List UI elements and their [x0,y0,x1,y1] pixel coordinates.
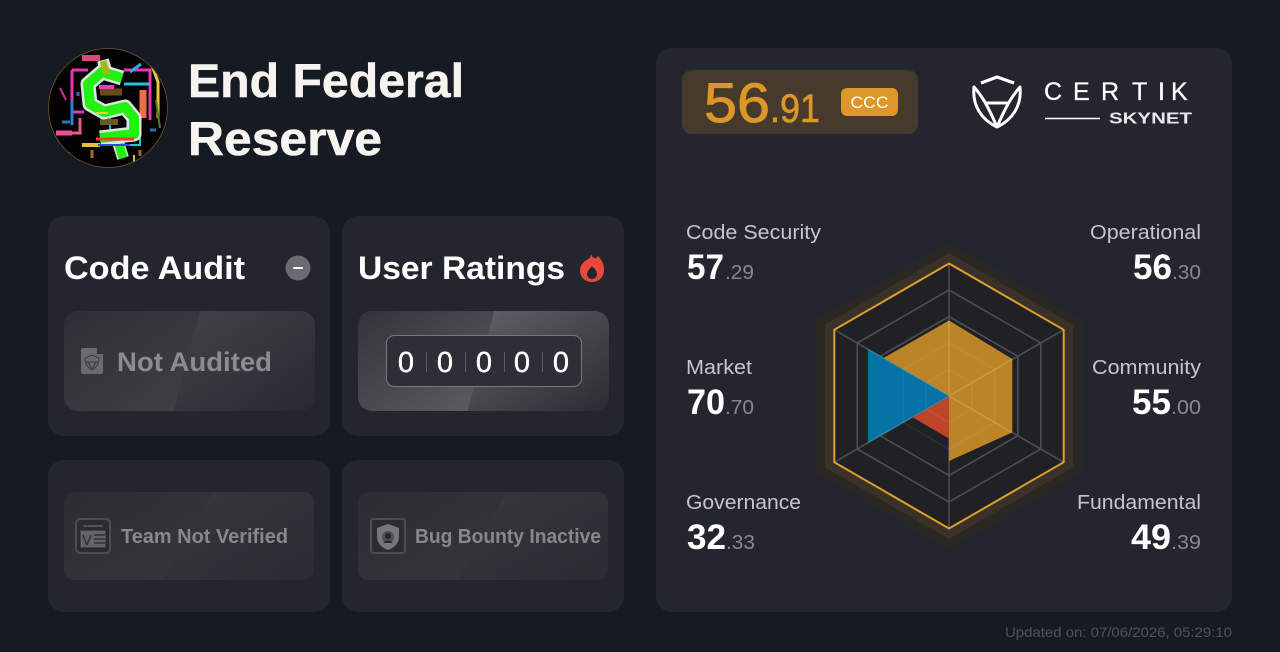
wordmark: CERTIK [1044,78,1188,106]
label: team not verified: Team Not Verified [121,526,288,548]
updated timestamp: Updated on: 07/06/2026, 05:29:10 [1005,624,1232,640]
metric: market: Market [686,357,752,379]
grade badge: CCC [850,93,888,112]
metric: operational: 56 [1133,248,1172,287]
label: not audited: Not Audited [117,347,272,377]
metric: governance: 32 [687,518,726,557]
score chip [682,70,918,134]
score value: .91 [770,87,820,131]
data polygon: orange [884,320,1012,461]
rating counter [386,336,582,386]
metric: code security: 57 [687,248,724,287]
metric: market [686,357,754,422]
rating box [358,311,609,411]
rating counter: 0 [398,347,414,379]
metric: community [1092,357,1201,422]
rating counter: 0 [553,347,569,379]
rating counter: 0 [437,347,453,379]
title: Reserve [188,112,382,165]
heading: user ratings: User Ratings [358,250,565,286]
data wedge: market blue [868,349,949,442]
metric: operational: Operational [1090,222,1201,244]
metric: code security: .29 [725,262,754,284]
metric: code security: Code Security [686,222,821,244]
icon: certik shield [974,77,1020,127]
radar chart [816,243,1082,549]
heading: code audit: Code Audit [64,250,245,286]
logo: certik skynet [974,77,1193,128]
status box: team not verified [64,492,314,580]
icon: audit document [81,348,103,374]
score value [704,71,820,134]
metric: community: Community [1092,357,1201,379]
metric: market: .70 [725,397,754,419]
panel: user ratings [342,216,624,436]
logo: certik skynet: SKYNET [1109,110,1193,128]
metric: community: 55 [1132,383,1171,422]
grade badge [841,88,898,116]
metric: community: .00 [1171,397,1201,419]
avatar: neon dollar sign [48,48,168,168]
status box: bug bounty inactive [358,492,608,580]
icon: flame [580,254,604,282]
metric: operational: .30 [1172,262,1201,284]
metric: fundamental: 49 [1131,518,1171,557]
title: End Federal [188,54,464,107]
panel: code audit [48,216,330,436]
rating counter: 0 [514,347,530,379]
status box: not audited [64,311,315,411]
panel: bug bounty [342,460,624,612]
label: bug bounty inactive: Bug Bounty Inactive [415,526,601,548]
icon: minus status [286,256,310,280]
metric: fundamental [1077,492,1201,557]
panel: skynet score [656,48,1232,612]
title [188,54,464,165]
icon: team id card [76,519,110,553]
rating counter: 0 [476,347,492,379]
data wedge: governance red [913,396,949,438]
score value: 56 [704,71,770,134]
metric: fundamental: .39 [1171,532,1201,554]
metric: operational [1090,222,1201,287]
panel: team verification [48,460,330,612]
metric: governance: .33 [726,532,755,554]
metric: code security [686,222,821,287]
metric: governance [686,492,801,557]
metric: fundamental: Fundamental [1077,492,1201,514]
icon: bounty shield [371,519,405,553]
metric: market: 70 [687,383,725,422]
metric: governance: Governance [686,492,801,514]
